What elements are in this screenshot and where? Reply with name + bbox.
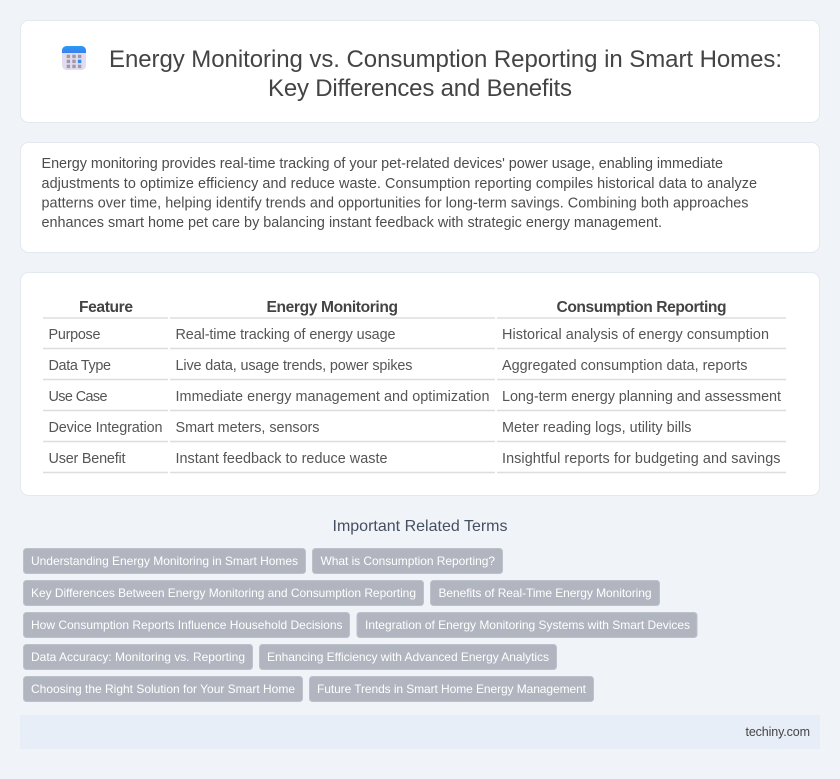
tag: Integration of Energy Monitoring Systems with Smart Devices: [365, 618, 690, 632]
tag: [312, 548, 502, 574]
table row: Use Case: Use Case: [48, 389, 108, 405]
table row: User Benefit: Insightful reports for budgeting and savings: [502, 451, 780, 467]
tag: Benefits of Real-Time Energy Monitoring: [438, 586, 652, 600]
table row: Device Integration: Smart meters, sensors: [176, 420, 320, 436]
panel: title header: [20, 20, 820, 122]
tag: [24, 612, 350, 638]
table row: Data Type: Aggregated consumption data, reports: [502, 358, 748, 374]
title: [109, 46, 782, 102]
footer: techiny.com: [746, 725, 810, 739]
table row: User Benefit: Instant feedback to reduce waste: [176, 451, 388, 467]
heading: related terms: Important Related Terms: [332, 518, 508, 535]
table row: User Benefit: User Benefit: [48, 451, 126, 467]
tag: Future Trends in Smart Home Energy Management: [317, 682, 587, 696]
table header row: Consumption Reporting: [556, 299, 726, 316]
table row: Purpose: Historical analysis of energy consumption: [502, 327, 769, 343]
title: Key Differences and Benefits: [268, 75, 572, 102]
text block: summary: [42, 156, 757, 231]
tag: How Consumption Reports Influence Household Decisions: [31, 618, 342, 632]
tag: Key Differences Between Energy Monitoring and Consumption Reporting: [31, 586, 416, 600]
text block: summary: patterns over time, helping identify trends and opportunities for long-term savings. Combining both approaches: [42, 196, 748, 212]
tag: What is Consumption Reporting?: [320, 554, 495, 568]
table row: Use Case: [43, 389, 786, 410]
table header row: Feature: [79, 299, 133, 316]
tag: [24, 644, 252, 670]
table row: Purpose: [43, 327, 786, 348]
table row: Purpose: Real-time tracking of energy usage: [176, 327, 396, 343]
icon: calendar: [62, 46, 86, 70]
table row: Data Type: [43, 358, 786, 380]
panel: summary paragraph: [20, 142, 820, 252]
tag: Enhancing Efficiency with Advanced Energy Analytics: [267, 650, 549, 664]
tag: Data Accuracy: Monitoring vs. Reporting: [31, 650, 245, 664]
tag: Understanding Energy Monitoring in Smart Homes: [31, 554, 298, 568]
table header row: Energy Monitoring: [266, 299, 398, 316]
table row: Device Integration: [43, 420, 786, 442]
tag: [24, 580, 424, 606]
text block: summary: adjustments to optimize efficiency and reduce waste. Consumption reporting compiles historical data to analyze: [42, 176, 757, 192]
tag: [357, 612, 697, 638]
table row: Purpose: Purpose: [48, 327, 100, 343]
footer: [20, 715, 820, 749]
table row: Data Type: Data Type: [48, 358, 111, 374]
table row: Data Type: Live data, usage trends, power spikes: [176, 358, 412, 374]
panel: comparison table: [20, 272, 820, 496]
table row: Use Case: Immediate energy management and optimization: [176, 389, 490, 405]
tag: [260, 644, 556, 670]
related terms tags: [24, 548, 697, 702]
table row: Device Integration: Meter reading logs, utility bills: [502, 420, 692, 436]
title: Energy Monitoring vs. Consumption Reporting in Smart Homes:: [109, 46, 782, 73]
table header row: [43, 299, 786, 318]
tag: [24, 548, 306, 574]
table row: Device Integration: Device Integration: [48, 420, 162, 436]
tag: [430, 580, 660, 606]
tag: [24, 676, 302, 702]
table row: User Benefit: [43, 451, 786, 472]
tag: [310, 676, 594, 702]
text block: summary: enhances smart home pet care by balancing instant feedback with strategic energy management.: [42, 215, 662, 231]
table row: Use Case: Long-term energy planning and assessment: [502, 389, 781, 405]
text block: summary: Energy monitoring provides real-time tracking of your pet-related devices' power usage, enabling immediate: [42, 156, 723, 172]
tag: Choosing the Right Solution for Your Smart Home: [31, 682, 295, 696]
